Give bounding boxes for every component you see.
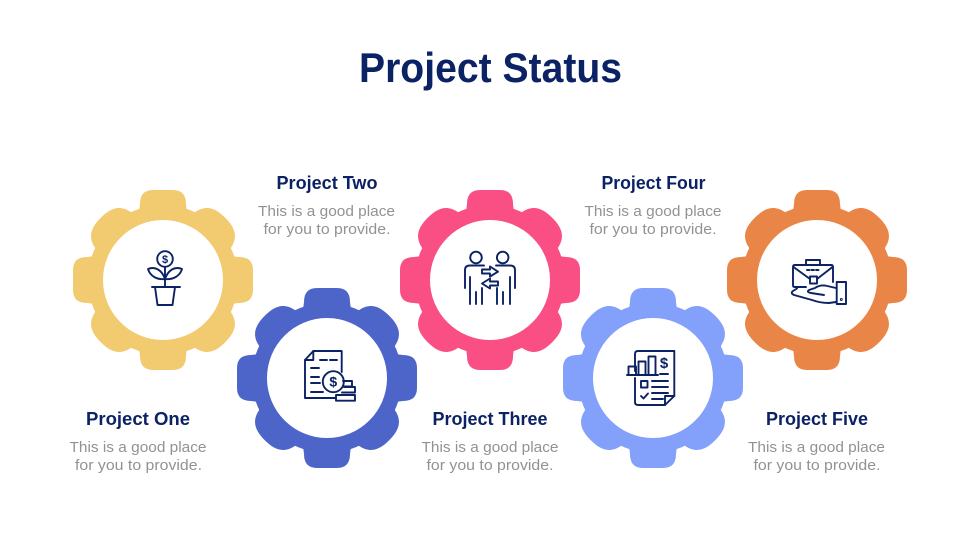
icon: money plant: $ xyxy=(162,254,168,266)
panel: project four gear xyxy=(563,288,743,468)
text block: project five xyxy=(748,408,885,474)
icon: invoice and coins: $ xyxy=(329,374,337,390)
text block: project four: This is a good place xyxy=(584,203,722,220)
text block: project two: Project Two xyxy=(276,172,378,193)
panel: project three gear xyxy=(400,190,580,370)
icon: two people exchanging xyxy=(465,252,515,304)
text block: project one: for you to provide. xyxy=(75,457,202,474)
text block: project one xyxy=(70,408,206,474)
text block: project three: This is a good place xyxy=(422,439,558,456)
text block: project three xyxy=(422,408,558,474)
icon: invoice and coins xyxy=(305,351,355,401)
text block: project two: for you to provide. xyxy=(264,221,390,238)
icon: briefcase on hand with phone xyxy=(792,260,846,304)
text block: project five: for you to provide. xyxy=(754,457,880,474)
icon: money plant xyxy=(148,251,182,305)
text block: project three: Project Three xyxy=(432,408,548,429)
text block: project four xyxy=(584,172,722,238)
text block: project four: Project Four xyxy=(602,172,706,193)
text block: project four: for you to provide. xyxy=(590,221,716,238)
text block: project two xyxy=(258,172,395,238)
panel: project five gear xyxy=(727,190,907,370)
text block: project two: This is a good place xyxy=(258,203,395,220)
title: Project Status xyxy=(359,44,622,91)
panel: project two gear xyxy=(237,288,417,468)
icon: financial report: $ xyxy=(660,355,669,372)
icon: financial report xyxy=(627,351,674,405)
text block: project five: Project Five xyxy=(766,408,868,429)
text block: project one: This is a good place xyxy=(70,439,206,456)
text block: project one: Project One xyxy=(86,408,190,429)
text block: project three: for you to provide. xyxy=(426,457,554,474)
text block: project five: This is a good place xyxy=(748,439,885,456)
panel: project one gear xyxy=(73,190,253,370)
